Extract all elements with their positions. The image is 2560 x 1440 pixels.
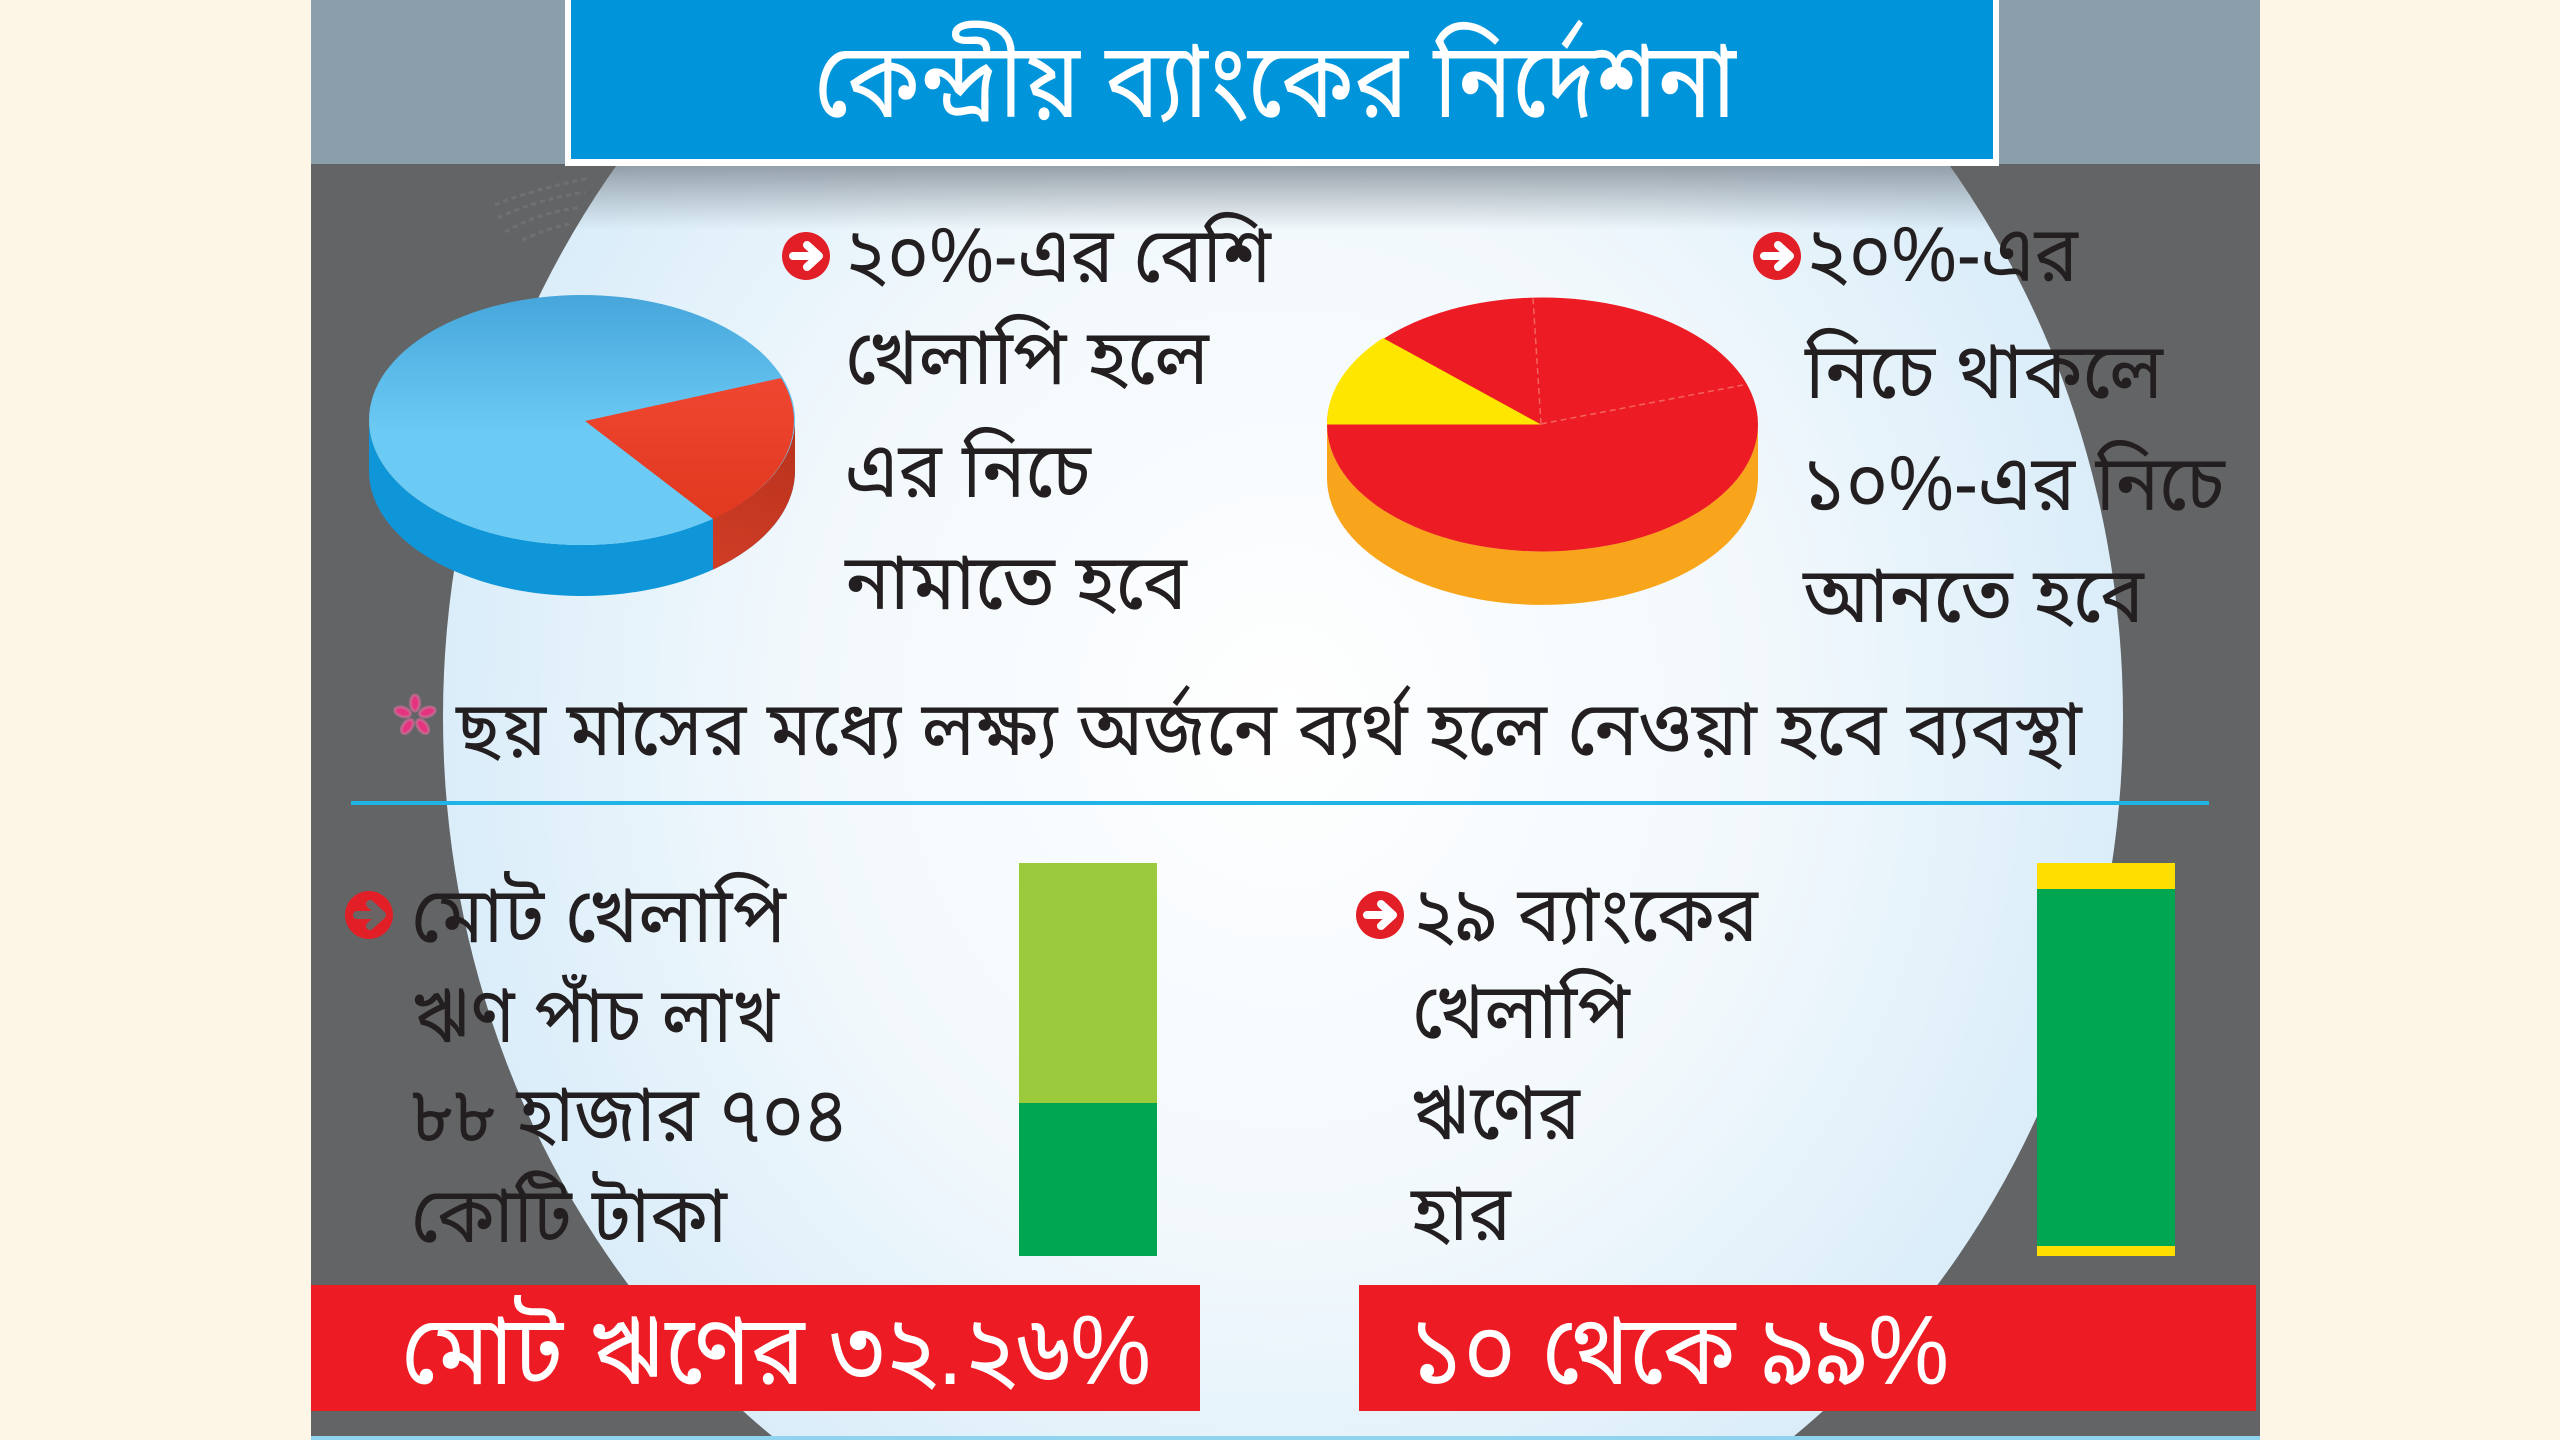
- icon: pink flower asterisk: [394, 695, 436, 736]
- callout: 10 to 99 percent: ১০ থেকে ৯৯%: [1409, 1295, 1949, 1405]
- text: below 20 percent: [1753, 210, 2226, 639]
- text: above 20 percent: খেলাপি হলে: [845, 313, 1210, 401]
- bar chart: share of total loans: [1019, 863, 1157, 1256]
- text: total defaulted loans: ঋণ পাঁচ লাখ: [411, 971, 780, 1059]
- top band: [311, 0, 2260, 165]
- text: total defaulted loans: মোট খেলাপি: [411, 870, 787, 959]
- text: above 20 percent: ২০%-এর বেশি: [844, 211, 1272, 299]
- callout: 32.26 percent of total loans: মোট ঋণের ৩২.২৬%: [401, 1295, 1151, 1405]
- divider line: [351, 801, 2209, 805]
- title banner: [565, 0, 1999, 166]
- text: below 20 percent: নিচে থাকলে: [1804, 327, 2164, 415]
- bottom cyan edge: [311, 1436, 2260, 1440]
- text: rate across 29 banks: [1356, 870, 1759, 1257]
- text: below 20 percent: ২০%-এর: [1805, 210, 2079, 298]
- panel: infographic body: [311, 0, 2260, 1440]
- text: rate across 29 banks: হার: [1410, 1169, 1512, 1257]
- text: above 20 percent: এর নিচে: [845, 426, 1092, 514]
- text: rate across 29 banks: ঋণের: [1410, 1068, 1581, 1156]
- pie chart: red with yellow slice: [1327, 298, 1758, 605]
- text: above 20 percent: নামাতে হবে: [844, 538, 1188, 626]
- icon: red arrow bullet: [1753, 232, 1801, 280]
- text: above 20 percent: [782, 211, 1272, 626]
- bar chart: range across banks: [2037, 863, 2175, 1256]
- icon: red arrow bullet: [1356, 891, 1404, 939]
- text: six month deadline note: ছয় মাসের মধ্যে লক্ষ্য অর্জনে ব্যর্থ হলে নেওয়া হবে ব্যবস্থা: [455, 685, 2083, 772]
- text: total defaulted loans: কোটি টাকা: [411, 1169, 728, 1259]
- dark backdrop: [311, 164, 2260, 1440]
- title text: কেন্দ্রীয় ব্যাংকের নির্দেশনা: [814, 19, 1738, 140]
- light circle: [443, 166, 2123, 1436]
- smudge texture: [495, 178, 590, 240]
- text: total defaulted loans: ৮৮ হাজার ৭০৪: [411, 1070, 847, 1158]
- pie chart: blue with red slice: [369, 295, 795, 596]
- text: total defaulted loans: [345, 870, 847, 1259]
- text: rate across 29 banks: খেলাপি: [1412, 967, 1631, 1055]
- text: below 20 percent: ১০%-এর নিচে: [1802, 439, 2226, 527]
- icon: red arrow bullet: [345, 891, 393, 939]
- callout: 10 to 99 percent: [1359, 1285, 2256, 1411]
- text: rate across 29 banks: ২৯ ব্যাংকের: [1412, 870, 1759, 958]
- text: below 20 percent: আনতে হবে: [1802, 551, 2145, 639]
- icon: red arrow bullet: [782, 232, 830, 280]
